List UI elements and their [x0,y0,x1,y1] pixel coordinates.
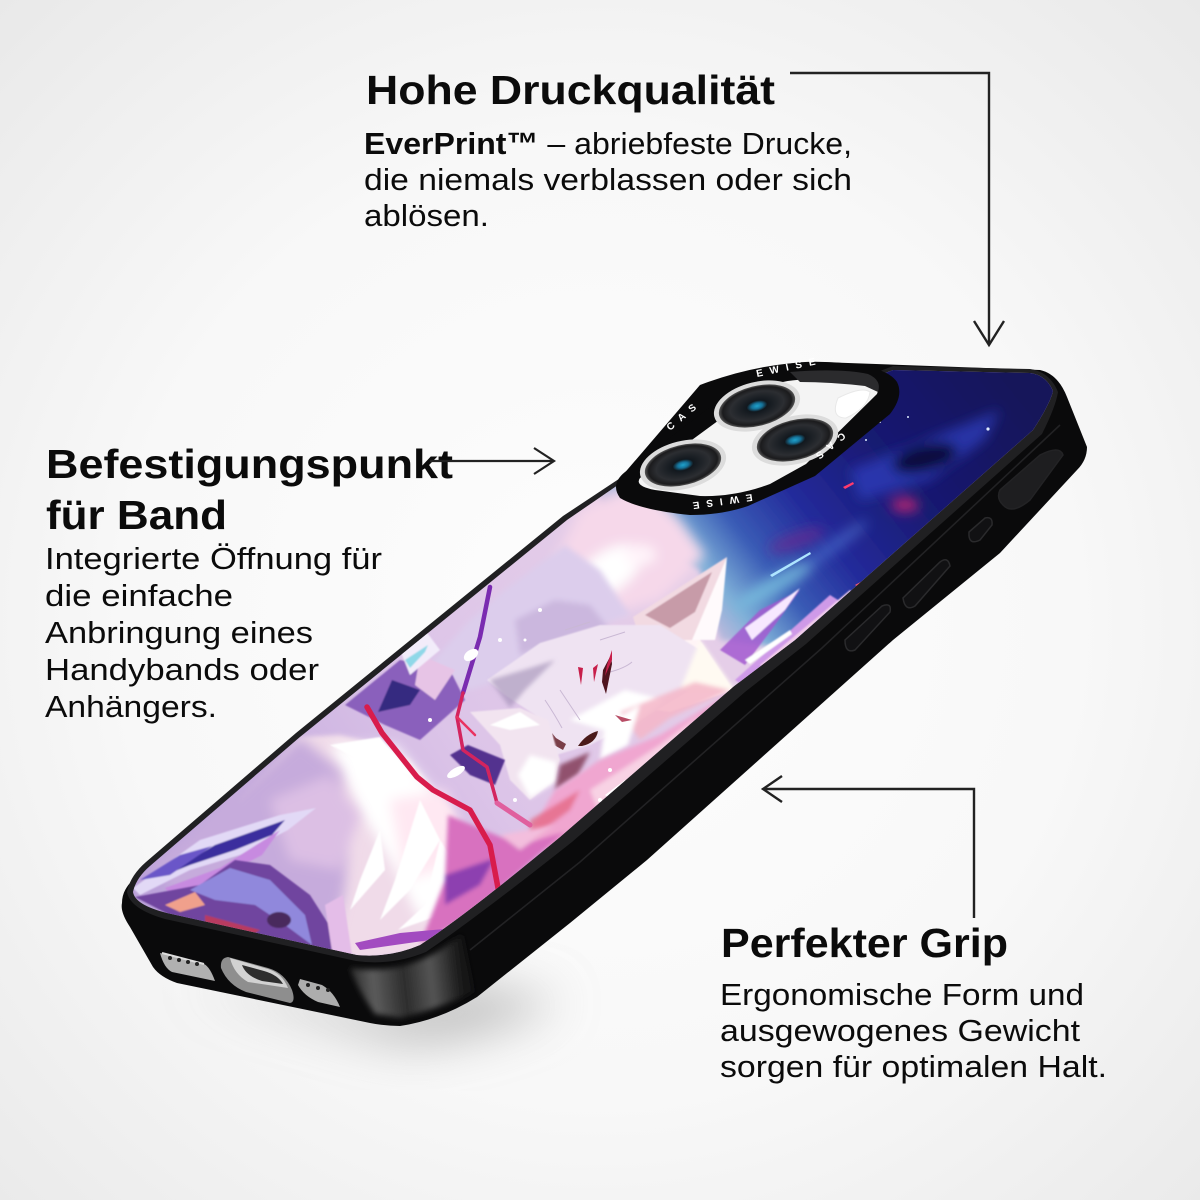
side groove line [470,425,1060,950]
feathered white fur strokes [331,736,447,930]
callout: Befestigungspunkt [45,441,453,724]
casewise lettering on ring: CAS [665,398,704,433]
description: die niemals verblassen oder sich [364,162,852,197]
heading [46,441,453,538]
charging port [221,957,294,1003]
ribbons [367,587,530,888]
sparkles and glitter [428,608,626,802]
case body [122,362,1087,1026]
description: Anhängers. [45,689,217,724]
case lip around print [127,366,1058,962]
fur shading [490,640,735,760]
purple floral cluster [345,630,505,785]
casewise lettering on ring [665,355,847,511]
description: EverPrint™ – abriebfeste Drucke, [364,126,852,161]
heading: Perfekter Grip [721,920,1008,966]
arrow: grip [763,776,974,918]
bottom speaker left [160,953,215,981]
description: die einfache [45,578,233,613]
fox paw [470,708,560,800]
description: sorgen für optimalen Halt. [720,1049,1107,1084]
description [45,541,382,724]
night sky [598,370,1053,649]
arrow: print quality [790,73,1004,345]
lens middle [747,406,843,474]
arrow: lanyard point [430,448,554,474]
lavender fur upper body [442,546,626,682]
fox eye and nose [552,715,632,750]
description: Ergonomische Form und [720,977,1084,1012]
long purple ribbon [355,929,443,950]
pink glitter ground right [528,694,726,850]
lavender lower-left fur [150,737,360,950]
heading: Befestigungspunkt [46,441,453,487]
large tail of fox [284,734,490,956]
glowing fur behind head [562,486,711,609]
right crystal streaks [720,588,852,683]
lens top [709,372,805,440]
bottom-right pink ground [420,815,565,945]
heading: für Band [46,492,227,538]
fox ears and head [487,557,733,755]
description: ausgewogenes Gewicht [720,1013,1080,1048]
description: Anbringung eines [45,615,313,650]
fox face marks [578,650,612,694]
callout: Hohe Druckqualität [364,67,852,233]
description [364,126,852,233]
inner top shade [790,370,879,392]
tail glow [330,745,475,920]
inner opening [639,378,878,496]
heading: Hohe Druckqualität [366,67,775,113]
casewise lettering on ring: EWISE [755,355,823,380]
description: ablösen. [364,198,489,233]
casewise lettering on ring: EWISE [685,491,753,511]
dark patch under head [555,752,590,790]
side buttons [845,450,1063,651]
module detail [835,390,870,418]
casewise lettering on ring: CAS [808,430,847,465]
phone shadow [190,985,560,1043]
nebula [732,410,1000,615]
crystal spike [133,808,316,900]
description: Handybands oder [45,652,319,687]
camera ring [616,362,899,515]
bottom corner gloss [350,934,474,1018]
bottom speaker right [298,979,340,1007]
camera bump [616,355,899,515]
description [720,977,1107,1084]
phone case [122,362,1087,1026]
phone print artwork [133,370,1053,956]
callout: Perfekter Grip [720,920,1107,1084]
lens lower [635,431,731,499]
fox whisker lines [545,622,632,728]
description: Integrierte Öffnung für [45,541,382,576]
stars and streaks [770,416,990,587]
lower-left creature in purple [135,860,352,960]
lavender base [133,370,1053,956]
